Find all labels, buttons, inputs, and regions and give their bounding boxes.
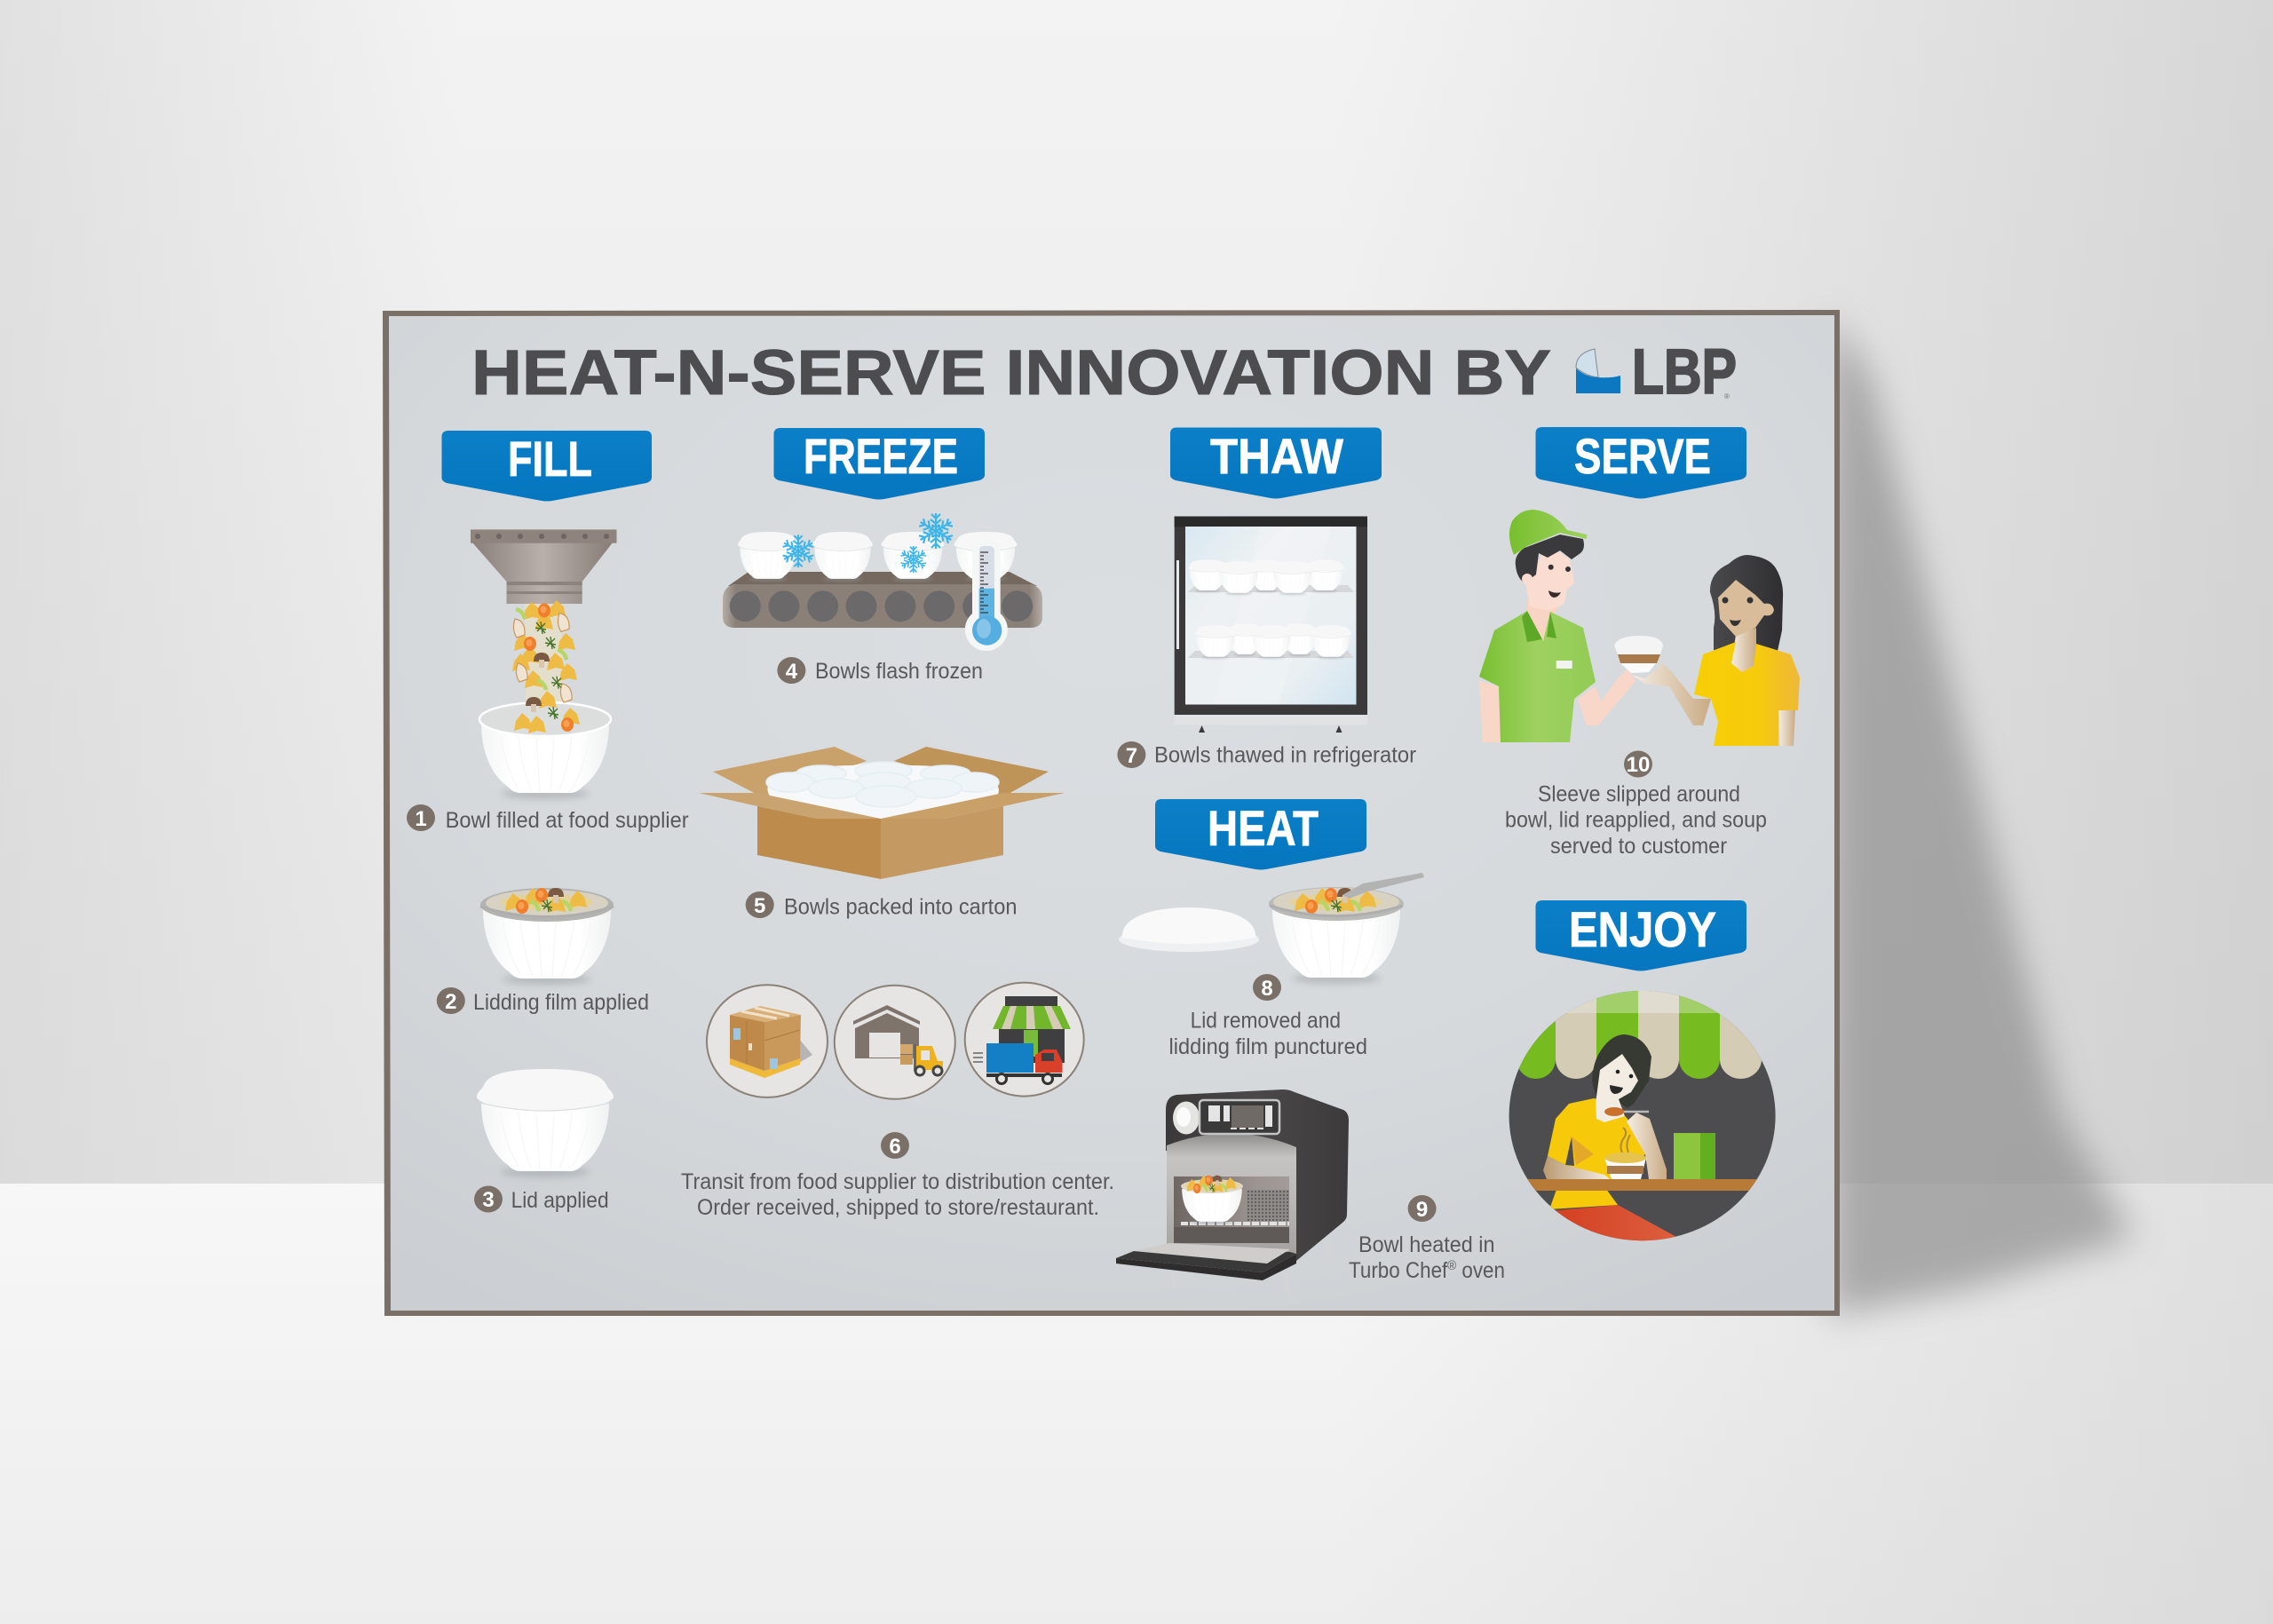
caption 8: 8 — [1261, 977, 1273, 1001]
banner: ENJOY: ENJOY — [1569, 901, 1716, 957]
caption 10: served to customer — [1550, 834, 1727, 859]
caption 6 — [681, 1132, 1114, 1220]
caption 9: 9 — [1416, 1198, 1428, 1222]
door — [1116, 1243, 1296, 1280]
banner: THAW — [1170, 428, 1382, 499]
shelf 1 — [1188, 559, 1354, 595]
icon: warehouse circle — [835, 986, 955, 1099]
shelf 2 — [1188, 623, 1354, 659]
top — [1548, 1098, 1645, 1209]
caption 8: lidding film punctured — [1168, 1034, 1367, 1059]
bowls in carton — [766, 762, 999, 820]
arms — [1627, 1113, 1667, 1179]
customer hair — [1710, 555, 1783, 651]
server shirt — [1479, 611, 1596, 742]
caption 1: Bowl filled at food supplier — [446, 808, 689, 833]
icon: lid and opened bowl with fork — [1119, 873, 1424, 984]
oven body — [1166, 1089, 1349, 1261]
awning — [1506, 991, 1762, 1079]
logo mark — [1576, 349, 1620, 393]
caption 10 — [1505, 751, 1767, 859]
gap between arm and torso — [1565, 1137, 1574, 1166]
conveyor — [723, 572, 1042, 628]
caption 10: Sleeve slipped around — [1538, 782, 1740, 807]
back flaps — [713, 747, 867, 799]
caption 5: Bowls packed into carton — [784, 895, 1018, 920]
caption 2: 2 — [445, 990, 456, 1014]
caption 7: 7 — [1126, 744, 1137, 768]
green bag — [1674, 1133, 1715, 1179]
banner: ENJOY — [1536, 900, 1746, 971]
caption 9: Turbo Chef — [1349, 1258, 1459, 1283]
caption 9: ® — [1447, 1258, 1456, 1273]
front flaps — [699, 793, 881, 819]
control panel — [1173, 1100, 1279, 1135]
icon: bowl with lidding film — [480, 888, 614, 985]
customer arm — [1631, 663, 1711, 725]
caption 6: Transit from food supplier to distribution center. — [681, 1169, 1114, 1194]
collar — [1522, 611, 1556, 642]
illustration: server handing soup to customer — [1479, 510, 1800, 746]
caption 3: Lid applied — [511, 1188, 609, 1213]
face and neck — [1596, 1054, 1638, 1122]
icon: oven — [1116, 1089, 1349, 1292]
carton body — [757, 806, 881, 879]
server hat — [1509, 510, 1587, 555]
caption 9 — [1349, 1195, 1505, 1283]
caption 3: 3 — [482, 1188, 495, 1212]
table — [1527, 1179, 1757, 1191]
LBP logo: ® — [1724, 392, 1730, 400]
cavity — [1174, 1176, 1289, 1243]
illustration: customer enjoying soup — [1506, 991, 1778, 1243]
floor — [0, 1184, 2273, 1624]
caption 4: Bowls flash frozen — [815, 659, 983, 684]
legs — [1174, 1241, 1327, 1292]
banner: SERVE: SERVE — [1574, 428, 1711, 484]
caption 6: 6 — [889, 1135, 901, 1159]
banner: SERVE — [1536, 427, 1746, 499]
icon: conveyor with freezing bowls — [723, 513, 1042, 651]
caption 5: 5 — [754, 894, 765, 918]
caption 7: Bowls thawed in refrigerator — [1154, 743, 1416, 768]
icon: carton of bowls — [699, 747, 1065, 879]
title: HEAT-N-SERVE INNOVATION BY — [471, 338, 1551, 408]
pants — [1556, 1205, 1676, 1241]
customer neck — [1731, 628, 1756, 672]
caption 4: 4 — [786, 660, 798, 684]
banner: FREEZE: FREEZE — [804, 428, 958, 484]
caption 9: Bowl heated in — [1358, 1232, 1495, 1257]
opened bowl — [1269, 887, 1404, 984]
server face — [1525, 552, 1574, 611]
caption 9: oven — [1456, 1258, 1505, 1283]
banner: FILL — [442, 431, 652, 501]
customer face — [1718, 580, 1774, 637]
soup cup with sleeve — [1614, 636, 1663, 673]
snowflakes — [781, 513, 954, 573]
server neck — [1527, 599, 1564, 641]
icon: bowl with lid — [477, 1069, 614, 1177]
LBP logo — [1576, 337, 1737, 408]
caption 6: Order received, shipped to store/restaurant. — [697, 1195, 1099, 1220]
banner: FREEZE — [774, 428, 985, 499]
caption 3 — [474, 1186, 609, 1213]
server — [1479, 510, 1635, 742]
customer dress — [1694, 642, 1800, 746]
icon: filler funnel pouring food into bowl — [471, 529, 616, 799]
caption 10: 10 — [1627, 753, 1650, 777]
caption 8: Lid removed and — [1191, 1009, 1341, 1034]
caption 8 — [1168, 974, 1367, 1059]
icon: pallet circle — [707, 985, 828, 1097]
caption 2: Lidding film applied — [473, 990, 649, 1015]
background wall — [0, 0, 2273, 1184]
bowl 1 — [479, 702, 611, 799]
food stream column — [525, 604, 564, 724]
lidded bowls on conveyor — [738, 532, 1017, 582]
board shadow — [1829, 313, 2134, 1316]
LBP logo: LBP — [1632, 337, 1737, 408]
banner: HEAT: HEAT — [1208, 800, 1319, 856]
hair — [1592, 1034, 1651, 1108]
board panel — [383, 310, 1840, 1316]
banner: THAW: THAW — [1210, 428, 1343, 484]
caption 1: 1 — [415, 807, 427, 831]
spoon, steam and bowl — [1604, 1107, 1649, 1179]
thermometer — [965, 539, 1008, 651]
funnel — [471, 529, 616, 604]
customer — [1631, 555, 1800, 746]
fork — [1342, 873, 1424, 899]
icon: store and truck circle — [965, 983, 1084, 1097]
banner: HEAT — [1155, 799, 1366, 870]
caption 10: bowl, lid reapplied, and soup — [1505, 807, 1767, 832]
banner: FILL: FILL — [508, 431, 592, 487]
lid — [1119, 907, 1259, 952]
falling food pieces — [512, 600, 580, 733]
server hair — [1516, 535, 1584, 583]
server arms — [1479, 669, 1635, 742]
icon: refrigerator — [1175, 517, 1367, 733]
